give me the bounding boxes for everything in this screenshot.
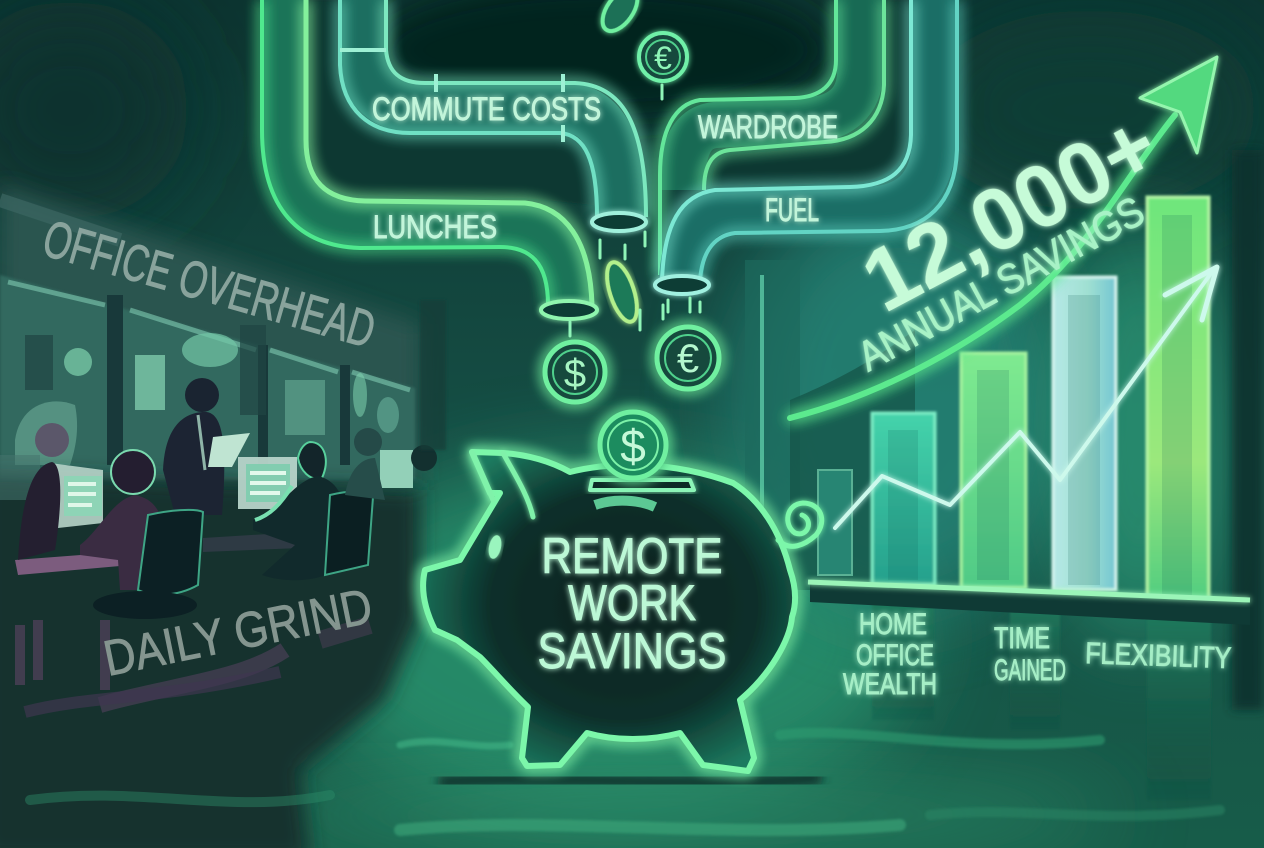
dark void between left pipes (310, 0, 594, 205)
pipe: wardrobe (660, 0, 884, 275)
coin: euro right: € (677, 337, 699, 381)
bar: third (1053, 277, 1116, 590)
pig slot (590, 480, 694, 490)
label: time gained: GAINED (994, 654, 1066, 687)
chart shelf (810, 584, 1250, 625)
pipe: commute costs (340, 0, 646, 231)
pipe label: fuel: FUEL (765, 192, 819, 228)
bar inner shading (888, 215, 1192, 595)
belly highlight (595, 501, 655, 507)
lower column shadows (872, 600, 1211, 800)
worker: seated right (253, 442, 373, 580)
bar: second (961, 353, 1026, 588)
heading: office overhead: OFFICE OVERHEAD (37, 210, 381, 360)
panel: piggy bank (423, 412, 822, 771)
pig tail (778, 503, 822, 546)
pig label: REMOTE (542, 528, 722, 584)
panel: growth chart (790, 57, 1250, 800)
coin: dollar entering slot: $ (620, 420, 646, 472)
pipe label: wardrobe: WARDROBE (698, 109, 838, 145)
panel: office scene (0, 185, 437, 848)
pipe label: commute costs: COMMUTE COSTS (372, 91, 601, 127)
label: home office wealth (843, 608, 937, 701)
pig label: SAVINGS (538, 623, 726, 679)
pig eye (487, 534, 503, 560)
panel: city backdrop and pillars (420, 260, 915, 590)
pig ground shadow (445, 778, 815, 783)
worker: seated left (80, 450, 203, 619)
coin: dollar left (545, 342, 605, 402)
heading: daily grind: DAILY GRIND (99, 578, 377, 687)
pig label: WORK (568, 575, 696, 631)
coin: euro right (657, 327, 719, 389)
pig body (423, 452, 795, 771)
label: time gained: TIME (994, 622, 1050, 655)
pipe: lunches (262, 0, 597, 319)
label: flexibility: FLEXIBILITY (1085, 637, 1232, 675)
label: home office wealth: WEALTH (843, 668, 937, 701)
panel: money pipes (262, 0, 957, 319)
falling drips (570, 85, 700, 336)
coin: falling edge-on (601, 259, 643, 325)
label: home office wealth: HOME (859, 608, 927, 641)
office wall and windows (0, 185, 420, 480)
worker: standing manager (163, 378, 250, 515)
coin: euro top (639, 33, 687, 81)
trend line arrow (835, 267, 1217, 528)
pig label (538, 528, 726, 679)
dark void between right pipes (712, 0, 908, 186)
floor brush strokes (400, 733, 1220, 830)
panel: coins above pig (545, 0, 719, 402)
coin: euro top: € (654, 40, 672, 76)
pipe label: lunches: LUNCHES (373, 209, 497, 245)
callout: savings amount: 12,000+ (846, 94, 1174, 331)
workers silhouettes (18, 378, 437, 619)
callout: annual savings: ANNUAL SAVINGS (850, 187, 1152, 380)
coin: dollar entering slot (600, 412, 666, 478)
label: time gained (994, 622, 1066, 687)
bar: flexibility (1147, 197, 1209, 605)
background workers (18, 423, 437, 560)
coin: dollar left: $ (564, 352, 586, 396)
pig ear (472, 452, 533, 517)
label: home office wealth: OFFICE (856, 639, 934, 672)
pipe: fuel (655, 0, 957, 294)
monitors (50, 450, 413, 528)
coin: top edge (596, 0, 644, 37)
swoosh arrow (790, 57, 1217, 418)
bar: home office (872, 413, 935, 585)
desk and lower dark area (0, 455, 420, 848)
